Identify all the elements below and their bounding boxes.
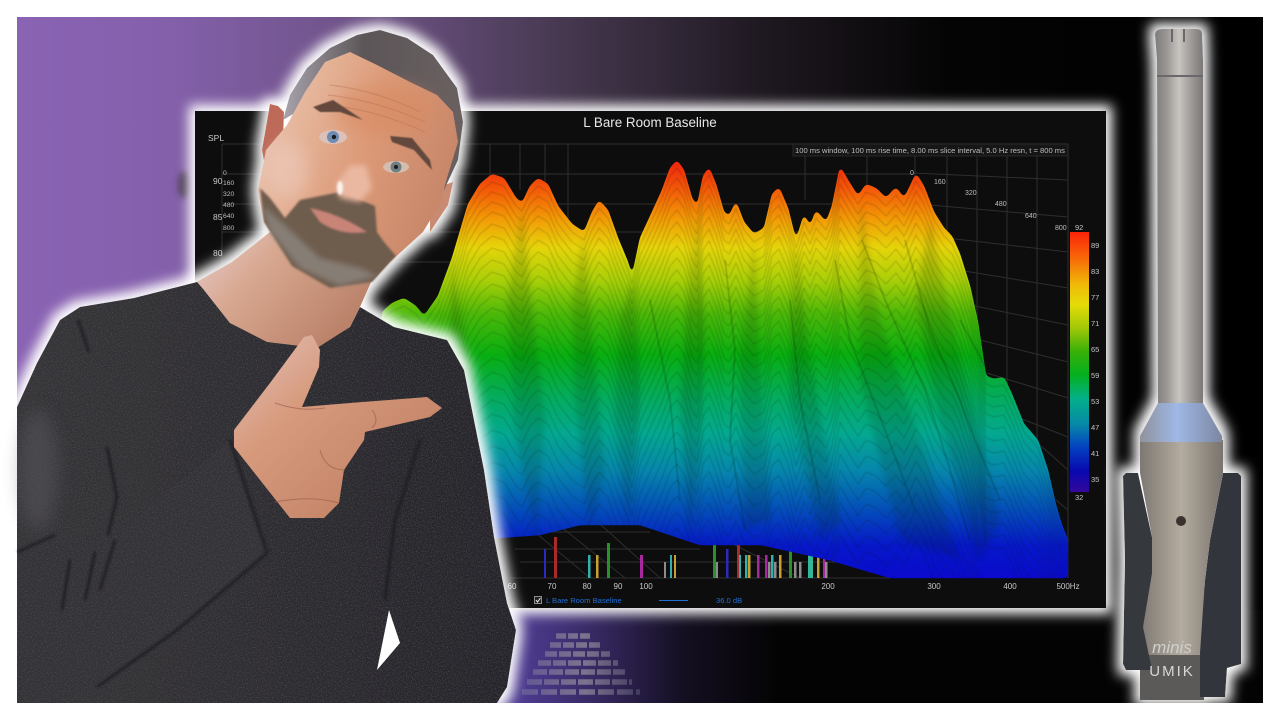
lower desk gradient: [480, 610, 1263, 703]
time axis labels left: [223, 170, 235, 232]
frequency axis labels: 200: [821, 582, 835, 591]
contour lines: [390, 167, 1068, 578]
frequency axis labels: 70: [548, 582, 557, 591]
colour scale labels: 41: [1091, 449, 1099, 458]
time axis labels left: 160: [223, 180, 235, 187]
frequency axis labels: 80: [583, 582, 592, 591]
mic blue band: [1140, 403, 1222, 442]
left eye: [319, 130, 347, 144]
frequency axis labels: [508, 582, 1080, 591]
legend: [534, 596, 742, 605]
ridge lines right side: [650, 240, 1000, 540]
right ear: [430, 182, 453, 232]
lips: [310, 208, 367, 233]
resonance marker bars: [544, 537, 828, 578]
ear: [262, 104, 284, 172]
mic port: [1176, 516, 1186, 526]
mic brand text: minis: [1152, 638, 1192, 657]
cheek highlight: [268, 142, 308, 198]
mic tube: [1155, 29, 1203, 403]
chart panel background with glow: [195, 111, 1106, 608]
mic lower body: [1140, 440, 1223, 700]
colour scale labels: 83: [1091, 267, 1099, 276]
time axis labels right: 640: [1025, 213, 1037, 220]
colour scale: [1070, 223, 1099, 502]
valley and ridge shading: [448, 200, 1000, 560]
time axis labels left: 320: [223, 191, 235, 198]
SPL axis labels: 85: [213, 212, 223, 222]
knuckle lines: [275, 403, 376, 503]
sleeve forearm: [17, 440, 267, 703]
forehead tone: [335, 84, 435, 136]
frequency axis labels: 90: [614, 582, 623, 591]
colour scale labels: [1075, 223, 1099, 502]
hair: [283, 30, 463, 190]
right eye: [383, 161, 409, 173]
colour scale labels: 89: [1091, 241, 1099, 250]
colour scale labels: 71: [1091, 319, 1099, 328]
analysis settings label: 100 ms window, 100 ms rise time, 8.00 ms slice interval, 5.0 Hz resn, t = 800 ms: [795, 146, 1065, 155]
mic capsule grooves: [1157, 29, 1203, 76]
icon: laptop keyboard: [522, 636, 640, 692]
rainbow fill: [370, 150, 1070, 580]
head: [258, 30, 463, 288]
time axis labels left: 640: [223, 213, 235, 220]
face: [258, 52, 458, 288]
chart title: L Bare Room Baseline: [583, 115, 717, 130]
time axis labels right: 480: [995, 201, 1007, 208]
frequency axis labels: 100: [639, 582, 653, 591]
time axis labels left: 800: [223, 225, 235, 232]
frequency axis labels: 300: [927, 582, 941, 591]
time axis labels right: [910, 170, 1067, 232]
frequency axis labels: 500Hz: [1056, 582, 1080, 591]
microphone: [1123, 29, 1241, 700]
colour scale labels: 32: [1075, 493, 1083, 502]
time axis labels right: 160: [934, 179, 946, 186]
SPL axis labels: 80: [213, 248, 223, 258]
mic clip left: [1123, 473, 1152, 670]
mic dark base: [1140, 655, 1204, 700]
colour scale labels: 35: [1091, 475, 1099, 484]
legend: 36.0 dB: [716, 596, 742, 605]
legend: L Bare Room Baseline: [546, 596, 622, 605]
colour scale labels: 77: [1091, 293, 1099, 302]
mic brand text: [1149, 638, 1195, 680]
time axis labels left: 0: [223, 170, 227, 177]
SPL axis labels: [208, 133, 224, 258]
colour scale labels: 65: [1091, 345, 1099, 354]
panel: waterfall chart: [195, 111, 1106, 710]
forehead wrinkles: [328, 85, 425, 132]
SPL axis labels: SPL: [208, 133, 224, 143]
chart grid: [222, 144, 1068, 578]
sweater fold shading: [17, 320, 420, 687]
gap between arm and torso: [377, 610, 400, 670]
nose: [336, 165, 372, 202]
neck: [193, 232, 372, 350]
nostril highlight: [337, 181, 343, 195]
waterfall surface: [382, 162, 1068, 578]
mic clip right: [1200, 473, 1241, 697]
colour scale labels: 59: [1091, 371, 1099, 380]
eyebrows: [313, 100, 432, 170]
time axis labels right: 800: [1055, 225, 1067, 232]
SPL axis labels: 90: [213, 176, 223, 186]
sweater: [17, 282, 516, 703]
pointing hand: [234, 335, 442, 518]
dark blob left of chart: [178, 171, 190, 199]
colour scale labels: 53: [1091, 397, 1099, 406]
colour scale labels: 92: [1075, 223, 1083, 232]
beard: [260, 188, 396, 288]
time axis labels right: 0: [910, 170, 914, 177]
time axis labels right: 320: [965, 190, 977, 197]
mic brand text: UMIK: [1149, 663, 1195, 680]
colour scale labels: 47: [1091, 423, 1099, 432]
sweater highlight: [18, 410, 58, 530]
person: [17, 30, 516, 703]
time axis labels left: 480: [223, 202, 235, 209]
frequency axis labels: 400: [1003, 582, 1017, 591]
beard grey tint: [262, 205, 378, 286]
frequency axis labels: 60: [508, 582, 517, 591]
